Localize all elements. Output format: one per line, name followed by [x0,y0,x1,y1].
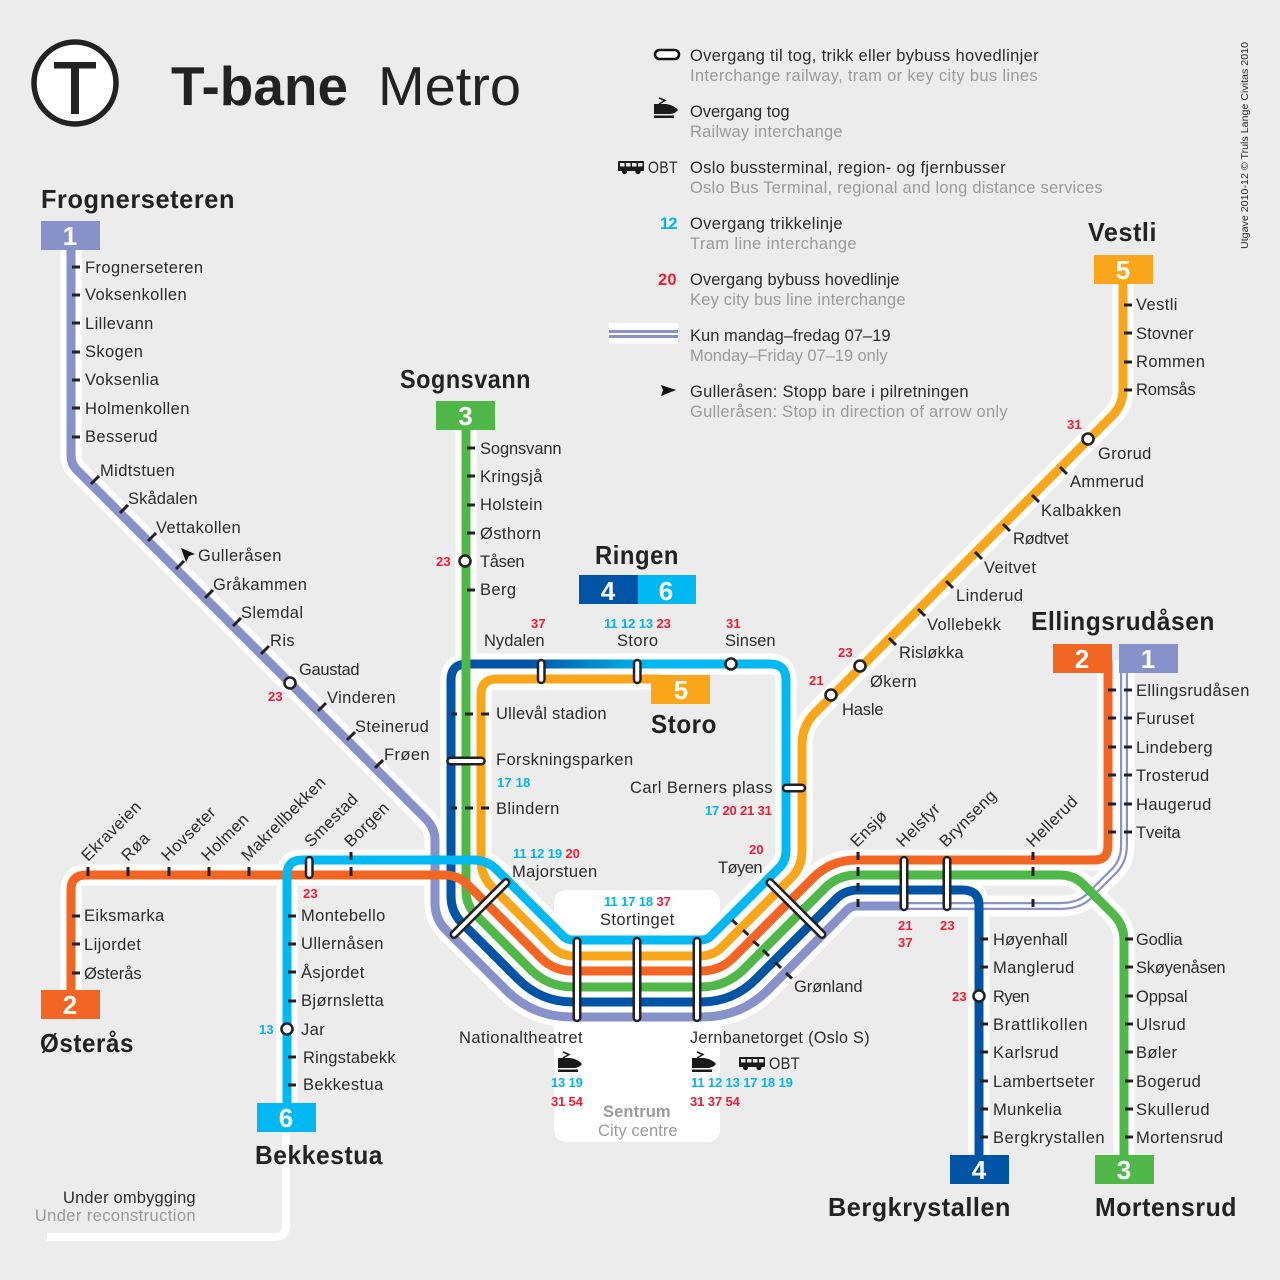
central white panel [554,890,720,1142]
stations: line 1 north: Skogen [85,343,143,361]
under reconstruction line [47,1125,286,1237]
terminus badge: line 3 Sognsvann: 3 [458,401,473,431]
tram and bus numbers: 23 [952,989,967,1004]
tram and bus numbers: 37 [531,616,546,631]
stations: line 3 south: Skullerud [1136,1101,1210,1119]
stations: line 1 north: Holmenkollen [85,400,190,418]
terminus badge: line 1 Ellingsrudåsen: 1 [1141,644,1155,674]
stations: line 1 north: Voksenlia [85,371,160,389]
stations: line 1 north: Gaustad [299,661,360,679]
terminal headings: Sognsvann [400,364,531,394]
legend: railway [654,98,843,141]
legend: bus terminal: OBT [648,159,678,177]
stations: ring: Ullevål stadion [496,705,607,723]
stations: line 5 east: Grorud [1098,445,1152,463]
tram and bus numbers: 11 12 13 17 18 19 [691,1075,793,1090]
stations: centre: Stortinget [600,911,675,929]
rings gradient top [532,660,660,668]
legend: interchange capsule: Overgang til tog, trikk eller bybuss hovedlinjer [690,47,1039,65]
stations: line 4 south: Høyenhall [993,931,1068,949]
under reconstruction label [35,1189,196,1225]
stations: line 1 north: Vinderen [327,689,396,707]
stations: ring: Blindern [496,800,560,818]
terminus badge: line 2 Ellingsrudåsen [1053,644,1112,674]
legend: weekdays only: Monday–Friday 07–19 only [690,347,888,365]
stations: line 1/2 east: Lindeberg [1136,739,1213,757]
legend: weekdays only: Kun mandag–fredag 07–19 [690,327,891,345]
icon: bus OBT [739,1057,765,1070]
stations: line 5 east [842,296,1205,719]
stations: rotated labels west: Borgen [341,799,393,851]
stations: line 1 north: Gulleråsen [198,547,282,565]
stations: rotated labels east: Hellerud [1023,792,1082,851]
legend: tram line: Tram line interchange [690,235,857,253]
stations: line 5 east: Rommen [1136,353,1205,371]
tram and bus numbers: 11 12 13 23 [604,616,671,631]
title [171,55,521,117]
line 6: cyan [287,664,786,1110]
stations: line 4 south [993,931,1105,1147]
stations: centre: OBT [769,1055,800,1073]
stations: line 3 south: Skøyenåsen [1136,959,1226,977]
legend: bus line [658,271,906,309]
stations: line 6 west: Montebello [301,907,386,925]
legend: weekdays only [609,323,891,365]
stations: line 3 north: Østhorn [480,525,542,543]
stations: line 1 north: Lillevann [85,315,154,333]
tram and bus numbers: 23 [940,918,955,933]
tram and bus numbers: 31 37 54 [690,1094,741,1109]
icon: T-bane logo [34,42,116,124]
station ticks [72,267,1133,1137]
stations: line 1 north: Midtstuen [100,462,175,480]
tram and bus numbers: 13 19 [551,1075,583,1090]
stations: line 3 north: Holstein [480,496,543,514]
tram and bus numbers: 31 [726,616,741,631]
stations: line 6 west: Bekkestua [303,1076,384,1094]
Ringen badges: 4 [601,576,616,606]
stations: line 5 east: Kalbakken [1041,502,1122,520]
interchange capsules [306,660,950,1021]
stations: rotated labels west: Ekraveien [78,798,145,865]
stations: line 2 west [84,907,165,983]
terminus badge: line 6 Bekkestua [257,1103,316,1133]
stations: line 1 north: Steinerud [355,718,429,736]
tram and bus numbers: 31 54 [551,1094,584,1109]
legend: direction arrow: Gulleråsen: Stop in direction of arrow only [690,403,1008,421]
stations: line 4 south: Manglerud [993,959,1075,977]
stations: line 3 north: Berg [480,581,516,599]
stations: line 1 north [85,259,430,764]
under reconstruction label: Under reconstruction [35,1207,196,1225]
stations: rotated labels west: Røa [118,829,154,865]
terminus badge: line 1 Frognerseteren: 1 [63,221,77,251]
stations: ring: Majorstuen [512,863,598,881]
stations: line 1/2 east: Haugerud [1136,796,1212,814]
stations: line 2 west: Østerås [84,965,142,983]
tram and bus numbers: 21 [809,673,824,688]
stations: line 1 north: Besserud [85,428,158,446]
legend: tram line: 12 [660,215,678,233]
stations: line 5 east: Rødtvet [1013,530,1069,548]
stations: centre [459,911,870,1073]
tram and bus numbers: 23 [838,645,853,660]
stations: line 1 north: Ris [270,632,295,650]
stations: ring [484,632,863,996]
terminus badge: line 2 Ellingsrudåsen: 2 [1075,644,1089,674]
terminal headings: Ringen [595,540,679,570]
stations: line 3 south: Oppsal [1136,988,1188,1006]
stations: line 5 east: Hasle [842,701,884,719]
terminal headings: Vestli [1088,217,1157,247]
terminus badge: line 5 Vestli: 5 [1116,255,1130,285]
stations: line 4 south: Lambertseter [993,1073,1095,1091]
stations: line 1 north: Frognerseteren [85,259,203,277]
legend: railway: Overgang tog [690,103,790,121]
stations: line 3 south: Mortensrud [1136,1129,1223,1147]
stations: line 3 north: Sognsvann [480,440,562,458]
arrow: Gulleråsen direction [181,548,195,562]
stations: rotated labels west: Smestad [301,790,362,851]
tram and bus numbers: 17 18 [497,775,531,790]
stations: line 5 east: Vollebekk [927,616,1002,634]
tram and bus numbers: 23 [303,886,318,901]
stations: ring: Carl Berners plass [630,779,773,797]
stations: line 3 south: Bogerud [1136,1073,1201,1091]
stations: line 5 east: Romsås [1136,381,1196,399]
terminus badge: line 1 Frognerseteren [41,221,100,251]
terminal headings: Frognerseteren [41,184,235,214]
terminus badge: line 3 Mortensrud [1095,1155,1154,1185]
icon: train Jernbanetorget [692,1052,716,1072]
centre label: Sentrum [603,1103,671,1121]
stations: line 3 north: Tåsen [480,553,525,571]
stations: line 5 east: Ammerud [1070,473,1144,491]
terminus badge: line 2 Østerås: 2 [63,990,77,1020]
stations: line 1 north: Voksenkollen [85,286,187,304]
stations: line 4 south: Ryen [993,988,1030,1006]
terminus badge: line 1 Ellingsrudåsen [1119,644,1178,674]
stations: line 6 west [301,907,396,1094]
stations: line 5 east: Risløkka [899,644,964,662]
line 5: amber [481,275,1123,956]
stations: line 1 north: Skådalen [128,490,198,508]
stations: rotated labels west: Hovseter [158,803,220,865]
tram and bus numbers: 20 [749,842,764,857]
stations: line 1/2 east: Trosterud [1136,767,1210,785]
icon: train Nationaltheatret [558,1052,582,1072]
stations: rotated labels west: Holmen [198,810,253,865]
line 4: dark blue [451,664,979,1160]
under reconstruction label: Under ombygging [63,1189,196,1207]
terminal headings: Bekkestua [255,1140,383,1170]
terminus badge: line 4 Bergkrystallen: 4 [972,1155,987,1185]
stations: ring: Forskningsparken [496,751,634,769]
tram and bus numbers: 23 [268,689,283,704]
stations: line 2 west: Eiksmarka [84,907,165,925]
stations: line 3 south [1136,931,1226,1147]
stations: rotated labels east [847,787,1082,851]
stations: line 5 east: Veitvet [984,559,1036,577]
tram and bus numbers: 23 [436,554,451,569]
tram and bus numbers: 11 12 19 20 [513,846,580,861]
legend: direction arrow: Gulleråsen: Stopp bare i pilretningen [690,383,969,401]
Ringen badges [579,575,696,606]
tram and bus numbers: 31 [1067,417,1082,432]
tram and bus numbers [259,417,1082,1109]
terminal headings: Østerås [40,1028,134,1058]
stations: ring: Storo [617,632,658,650]
line 2: orange [71,660,1108,995]
terminus badge: line 5 Vestli [1094,255,1153,285]
stations: line 1 north: Vettakollen [156,519,241,537]
stations: line 6 west: Ullernåsen [301,935,384,953]
stations: rotated labels east: Brynseng [936,787,1000,851]
stations: ring: Nydalen [484,632,545,650]
stations: centre: Jernbanetorget (Oslo S) [690,1029,870,1047]
stations: line 1 north: Slemdal [241,604,303,622]
legend: bus terminal: Oslo Bus Terminal, regional and long distance services [690,179,1103,197]
tram and bus numbers: 13 [259,1022,274,1037]
stations: rotated labels east: Helsfyr [893,800,944,851]
terminal headings: Mortensrud [1095,1192,1237,1222]
stations: line 1/2 east: Furuset [1136,710,1195,728]
stations: line 4 south: Karlsrud [993,1044,1059,1062]
stations: line 5 east: Stovner [1136,325,1194,343]
legend: bus line: Key city bus line interchange [690,291,906,309]
stations: line 4 south: Brattlikollen [993,1016,1088,1034]
legend: bus terminal: Oslo bussterminal, region- og fjernbusser [690,159,1006,177]
stations: rotated labels west: Makrellbekken [238,773,330,865]
stations: line 4 south: Bergkrystallen [993,1129,1105,1147]
terminal headings: Storo [651,709,717,739]
stations: ring: Grønland [794,978,863,996]
terminal headings [40,184,1237,1222]
terminus badge: line 2 Østerås [41,990,100,1020]
stations: line 6 west: Ringstabekk [303,1049,396,1067]
terminus badge: line 4 Bergkrystallen [950,1155,1009,1185]
terminal headings: Bergkrystallen [828,1192,1011,1222]
terminus badge: line 5 Storo [651,675,710,705]
legend: interchange capsule: Interchange railway, tram or key city bus lines [690,67,1038,85]
legend: railway: Railway interchange [690,123,843,141]
Ringen badges: 6 [659,576,673,606]
title: T-bane [171,55,348,117]
legend: bus line: 20 [658,271,677,289]
stations: line 1/2 east: Tveita [1136,824,1181,842]
legend: tram line [660,215,857,253]
legend [609,47,1103,421]
stations: line 3 south: Bøler [1136,1044,1178,1062]
terminus badge: line 3 Sognsvann [436,401,495,431]
stations: line 3 north: Kringsjå [480,468,543,486]
tram and bus numbers: 17 20 21 31 [705,803,772,818]
line casings [71,240,1124,1160]
credit: Utgave 2010-12 © Truls Lange Civitas 2010 [1239,42,1251,249]
stations: ring: Tøyen [718,859,763,877]
stations: rotated labels east: Ensjø [847,807,891,851]
stations: ring: Sinsen [725,632,776,650]
stations: line 6 west: Åsjordet [301,963,365,982]
stations: line 5 east: Økern [870,673,917,691]
title: Metro [378,55,521,117]
legend: bus line: Overgang bybuss hovedlinje [690,271,900,289]
terminus badge: line 5 Storo: 5 [674,675,688,705]
legend: tram line: Overgang trikkelinje [690,215,843,233]
stations: line 5 east: Vestli [1136,296,1178,314]
tram and bus numbers: 11 17 18 37 [604,894,671,909]
stations: line 6 west: Bjørnsletta [301,992,385,1010]
terminus badge: line 6 Bekkestua: 6 [279,1103,293,1133]
line 1: periwinkle [71,240,1124,1017]
stations: line 6 west: Jar [301,1021,325,1039]
stations: line 1/2 east [1136,682,1250,842]
stations: line 3 north [480,440,562,599]
legend: bus terminal [618,159,1103,197]
stations: rotated labels west [78,773,393,865]
centre label [598,1103,678,1140]
stations: line 1/2 east: Ellingsrudåsen [1136,682,1250,700]
legend: interchange capsule [655,47,1039,85]
terminal headings: Ellingsrudåsen [1031,606,1215,636]
stations: line 1 north: Frøen [384,746,430,764]
stations: line 5 east: Linderud [956,587,1023,605]
stations: centre: Nationaltheatret [459,1029,583,1047]
stations: line 2 west: Lijordet [84,936,141,954]
stations: line 4 south: Munkelia [993,1101,1063,1119]
stations: line 1 north: Gråkammen [213,576,307,594]
terminus badge: line 3 Mortensrud: 3 [1117,1155,1131,1185]
stations: line 3 south: Godlia [1136,931,1183,949]
tram and bus numbers: 37 [898,935,913,950]
station circles [282,434,1094,1034]
line 3: green [466,420,1124,1160]
tram and bus numbers: 21 [898,918,913,933]
legend: direction arrow [661,383,1008,421]
stations: line 3 south: Ulsrud [1136,1016,1186,1034]
centre label: City centre [598,1122,678,1140]
